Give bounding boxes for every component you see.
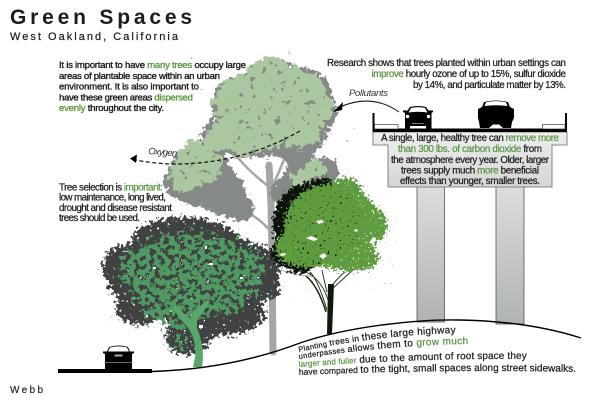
text: planting trees along hill: Planting trees in these large highway bbox=[298, 326, 456, 352]
branches of foreground tree bbox=[281, 268, 355, 312]
overpass columns bbox=[417, 186, 444, 322]
pale green foliage of tall tree bbox=[168, 57, 335, 193]
car on road, rear view bbox=[103, 346, 134, 369]
white gaps in mid tree bbox=[146, 246, 243, 328]
text: many trees: It is important to have many trees occupy large bbox=[59, 60, 246, 71]
text: many trees bbox=[59, 60, 246, 114]
text: research: by 14%, and particulate matter by 13%. bbox=[413, 80, 566, 91]
trunk of mid tree bbox=[172, 300, 210, 367]
green crown of foreground tree bbox=[275, 177, 388, 272]
text: planting trees along hill bbox=[298, 326, 576, 376]
subtitle: West Oakland, California bbox=[10, 31, 179, 43]
black shaded crown edge bbox=[270, 176, 364, 275]
road surface bbox=[58, 369, 152, 373]
text: tree capacity on overpass: the atmosphere every year. Older, larger bbox=[391, 155, 550, 166]
text: tree capacity on overpass bbox=[381, 133, 560, 187]
overpass girder bbox=[373, 132, 567, 187]
text: tree capacity on overpass: A single, large, healthy tree can remove more bbox=[381, 133, 560, 144]
road deck bbox=[372, 128, 567, 132]
text: tree selection: drought and disease resistant bbox=[59, 203, 172, 214]
grey crown of tall tree bbox=[163, 58, 340, 223]
text: planting trees along hill: underpasses allows them to grow much bbox=[298, 336, 468, 359]
text: tree capacity on overpass: trees supply much more beneficial bbox=[401, 166, 539, 176]
foreground bright green tree bbox=[270, 176, 388, 334]
tall pale background tree bbox=[163, 57, 340, 352]
credit: Webb bbox=[10, 385, 43, 396]
text: many trees: areas of plantable space within an urban bbox=[59, 71, 220, 82]
text: research: Research shows that trees planted within urban settings can bbox=[327, 58, 566, 69]
highway overpass bbox=[372, 113, 567, 324]
label: oxygen arrow: Oxygen bbox=[148, 146, 178, 160]
truck on overpass, rear view bbox=[478, 100, 514, 128]
text: many trees: evenly throughout the city. bbox=[59, 103, 164, 114]
label: pollutants arrow bbox=[333, 88, 399, 112]
white gaps in foreground tree bbox=[280, 220, 376, 259]
car on overpass, front view bbox=[403, 106, 433, 128]
ground hill line bbox=[152, 320, 581, 372]
text: many trees: have these green areas dispersed bbox=[59, 92, 193, 103]
text: tree capacity on overpass: than 300 lbs. of carbon dioxide from bbox=[398, 144, 542, 155]
text: many trees: environment. It is also important to bbox=[59, 82, 199, 92]
text: tree selection: low maintenance, long lived, bbox=[59, 193, 166, 204]
text: planting trees along hill: larger and fuller due to the amount of root space they bbox=[298, 352, 527, 368]
dark crown of mid tree bbox=[101, 216, 282, 356]
text: tree capacity on overpass: effects than younger, smaller trees. bbox=[400, 176, 540, 187]
trunk of foreground tree bbox=[327, 284, 334, 334]
text: planting trees along hill: have compared to the tight, small spaces along street sidewalks. bbox=[299, 364, 576, 376]
text: tree selection bbox=[59, 182, 172, 224]
text: tree selection: Tree selection is important: bbox=[59, 182, 163, 194]
label: oxygen arrow bbox=[130, 131, 300, 164]
title: Green Spaces bbox=[10, 6, 192, 29]
trunk and branches of tall tree bbox=[212, 146, 288, 352]
text: tree selection: trees should be used. bbox=[59, 213, 140, 224]
text: research: improve hourly ozone of up to 15%, sulfur dioxide bbox=[372, 69, 567, 80]
text: research bbox=[327, 58, 567, 91]
green foliage of mid tree bbox=[114, 230, 270, 354]
label: pollutants arrow: Pollutants bbox=[349, 88, 388, 99]
mid-ground dark green tree bbox=[101, 216, 282, 367]
